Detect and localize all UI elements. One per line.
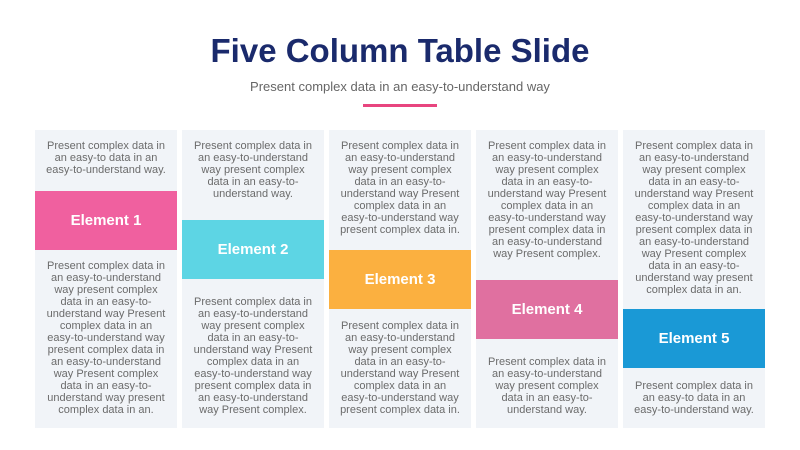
text: col1 top: Present complex data in — [47, 140, 165, 152]
text: col3 top: data in an easy-to- — [354, 176, 446, 188]
text: col2 top: way present complex — [201, 164, 305, 176]
panel: column 5 — [623, 130, 765, 428]
text: col4 top: way Present complex. — [493, 248, 601, 260]
text: col1 bottom: data in an easy-to- — [60, 296, 152, 308]
text: col3 bottom: understand way Present — [341, 368, 459, 380]
text: col1 bottom: complex data in an. — [58, 404, 154, 416]
text: col3 top — [340, 140, 460, 236]
element 2: Element 2 — [218, 241, 288, 258]
accent underline — [363, 104, 437, 107]
element 1: Element 1 — [71, 212, 141, 229]
text: col3 bottom: way present complex — [348, 344, 452, 356]
text: col4 bottom: data in an easy-to- — [501, 392, 593, 404]
element 4 — [476, 280, 618, 339]
text: col4 top — [488, 140, 606, 260]
element 5 — [623, 309, 765, 368]
text: col2 bottom: Present complex data in — [194, 296, 312, 308]
text: col1 bottom: Present complex data in — [47, 260, 165, 272]
text: col3 bottom: Present complex data in — [341, 320, 459, 332]
text: col4 top: an easy-to-understand — [492, 152, 602, 164]
text: col1 bottom: easy-to-understand way — [47, 332, 165, 344]
text: col4 bottom: way present complex — [495, 380, 599, 392]
text: col5 top: Present complex data in — [635, 140, 753, 152]
panel: column 3 — [329, 130, 471, 428]
text: col2 top — [194, 140, 312, 200]
text: col3 top: understand way Present — [341, 188, 459, 200]
panel: column 4 — [476, 130, 618, 428]
text: col2 bottom: an easy-to-understand — [198, 308, 308, 320]
text: col5 top: way present complex — [642, 164, 746, 176]
text: col4 top: data in an easy-to- — [501, 176, 593, 188]
text: col1 bottom: way present complex — [54, 284, 158, 296]
text: col2 bottom: way Present complex. — [199, 404, 307, 416]
panel: column 1 — [35, 130, 177, 428]
text: col3 top: way present complex — [348, 164, 452, 176]
text: col2 bottom: data in an easy-to- — [207, 332, 299, 344]
text: col3 bottom: an easy-to-understand — [345, 332, 455, 344]
text: col5 bottom: easy-to-understand way. — [634, 404, 754, 416]
text: col1 bottom: data in an easy-to- — [60, 380, 152, 392]
text: col1 bottom: understand way present — [47, 392, 165, 404]
text: col1 top: easy-to-understand way. — [46, 164, 166, 176]
title: Five Column Table Slide — [211, 32, 589, 69]
text: col1 bottom: an easy-to-understand — [51, 356, 161, 368]
text: col2 bottom: easy-to-understand way — [194, 368, 312, 380]
text: col5 top: way Present complex — [642, 248, 746, 260]
text: col2 bottom — [194, 296, 312, 416]
text: col4 top: easy-to-understand way — [488, 212, 606, 224]
text: col3 top: complex data in an — [354, 200, 446, 212]
text: col1 top: an easy-to data in an — [55, 152, 157, 164]
text: col5 bottom: Present complex data in — [635, 380, 753, 392]
text: col2 bottom: an easy-to-understand — [198, 392, 308, 404]
text: col4 top: way present complex — [495, 164, 599, 176]
text: col4 top: present complex data in — [489, 224, 605, 236]
text: col5 top: understand way Present — [635, 188, 753, 200]
text: col4 top: understand way Present — [488, 188, 606, 200]
text: col1 bottom — [47, 260, 166, 416]
text: col3 top: an easy-to-understand — [345, 152, 455, 164]
text: col3 bottom: present complex data in. — [340, 404, 460, 416]
text: col1 top — [46, 140, 166, 176]
text: col2 top: an easy-to-understand — [198, 152, 308, 164]
text: col3 top: easy-to-understand way — [341, 212, 459, 224]
text: col2 top: data in an easy-to- — [207, 176, 299, 188]
text: col1 bottom: complex data in an — [60, 320, 152, 332]
text: col3 bottom: easy-to-understand way — [341, 392, 459, 404]
text: col3 bottom: data in an easy-to- — [354, 356, 446, 368]
text: col5 top: data in an easy-to- — [648, 260, 740, 272]
text: col5 top — [635, 140, 754, 296]
element 2 — [182, 220, 324, 279]
element 5: Element 5 — [659, 330, 729, 347]
text: col5 top: present complex data in — [636, 224, 752, 236]
text: col4 bottom — [488, 356, 606, 416]
text: col5 top: understand way present — [635, 272, 753, 284]
element 1 — [35, 191, 177, 250]
text: col2 top: understand way. — [213, 188, 293, 200]
text: col5 bottom: an easy-to data in an — [643, 392, 745, 404]
subtitle: Present complex data in an easy-to-understand way — [250, 79, 550, 94]
text: col4 top: Present complex data in — [488, 140, 606, 152]
text: col1 bottom: understand way Present — [47, 308, 165, 320]
text: col2 bottom: way present complex — [201, 320, 305, 332]
text: col5 top: complex data in an. — [646, 284, 742, 296]
panel: column 2 — [182, 130, 324, 428]
text: col3 top: present complex data in. — [340, 224, 460, 236]
text: col4 bottom: understand way. — [507, 404, 587, 416]
text: col2 bottom: complex data in an — [207, 356, 299, 368]
text: col5 top: complex data in an — [648, 200, 740, 212]
element 3 — [329, 250, 471, 309]
text: col3 top: Present complex data in — [341, 140, 459, 152]
element 4: Element 4 — [512, 301, 582, 318]
text: col4 top: an easy-to-understand — [492, 236, 602, 248]
text: col1 bottom: way Present complex — [54, 368, 158, 380]
text: col5 bottom — [634, 380, 754, 416]
text: col2 top: Present complex data in — [194, 140, 312, 152]
text: col1 bottom: present complex data in — [48, 344, 164, 356]
text: col4 bottom: an easy-to-understand — [492, 368, 602, 380]
text: col5 top: easy-to-understand way — [635, 212, 753, 224]
element 3: Element 3 — [365, 271, 435, 288]
text: col4 bottom: Present complex data in — [488, 356, 606, 368]
text: col2 bottom: present complex data in — [195, 380, 311, 392]
text: col2 bottom: understand way Present — [194, 344, 312, 356]
text: col3 bottom — [340, 320, 460, 416]
text: col1 bottom: an easy-to-understand — [51, 272, 161, 284]
text: col5 top: an easy-to-understand — [639, 152, 749, 164]
text: col3 bottom: complex data in an — [354, 380, 446, 392]
text: col5 top: an easy-to-understand — [639, 236, 749, 248]
text: col5 top: data in an easy-to- — [648, 176, 740, 188]
text: col4 top: complex data in an — [501, 200, 593, 212]
